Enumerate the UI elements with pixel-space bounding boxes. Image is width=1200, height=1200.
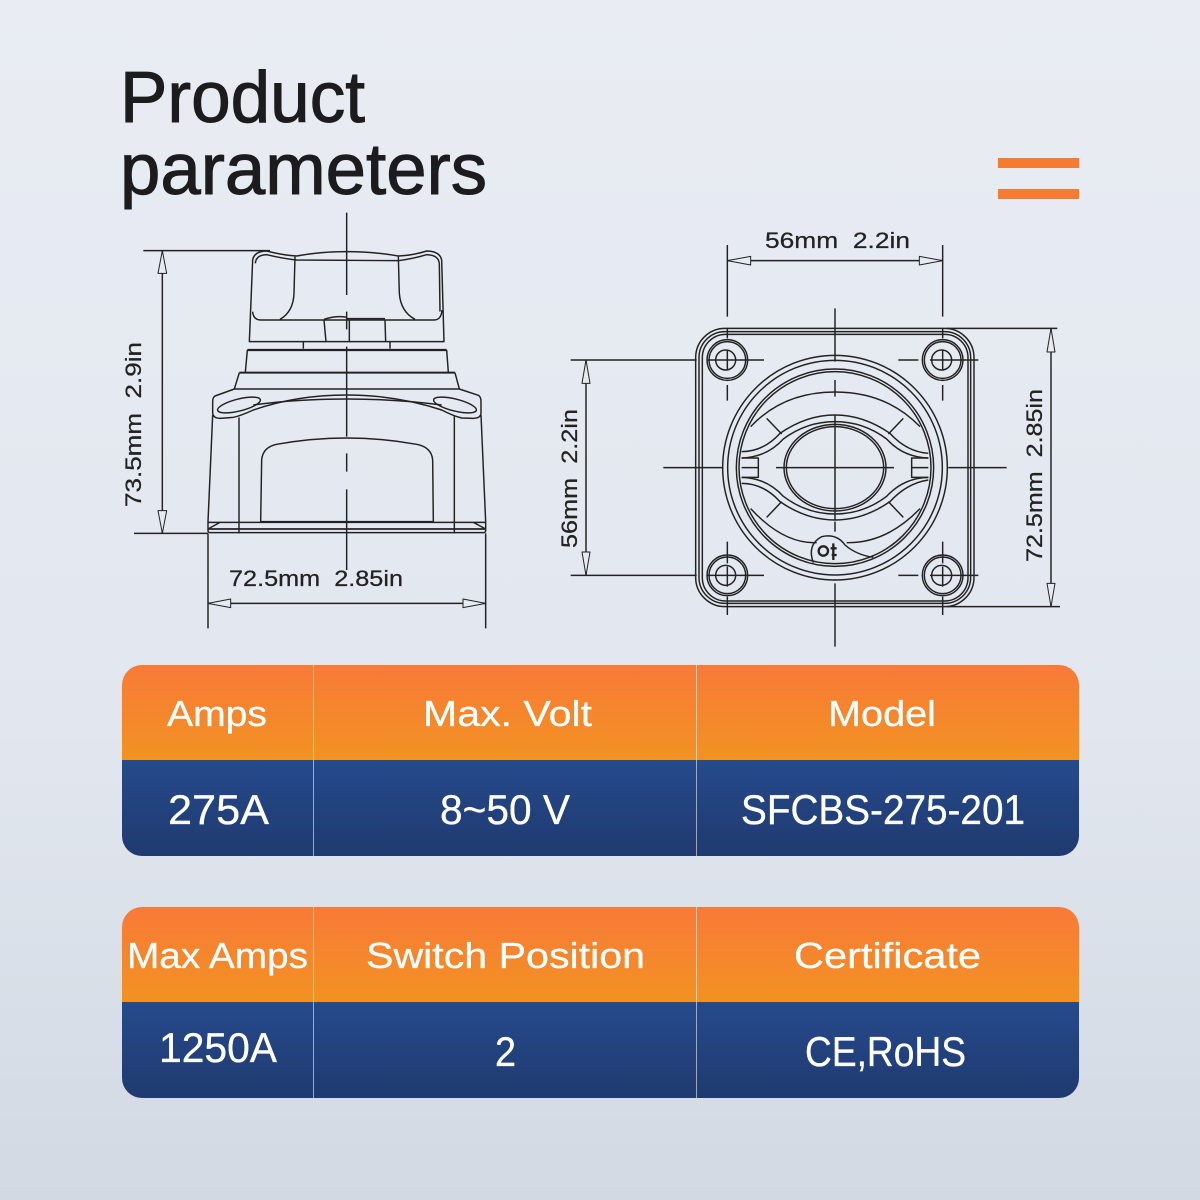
icon: orange double bar bbox=[998, 158, 1079, 199]
mounting plate bbox=[696, 328, 974, 607]
title bbox=[120, 58, 487, 210]
table: max amps, switch position, certificate: Switch Position bbox=[366, 935, 645, 976]
title: Product bbox=[120, 58, 365, 138]
table: max amps, switch position, certificate: Max Amps bbox=[127, 935, 308, 976]
mounting holes bbox=[707, 340, 963, 596]
rotary knob bbox=[723, 355, 947, 580]
centre lines and dimension lines bbox=[571, 245, 1060, 647]
table: amps, voltage, model: Max. Volt bbox=[423, 693, 592, 734]
table: max amps, switch position, certificate: CE,RoHS bbox=[805, 1028, 966, 1075]
title: parameters bbox=[120, 130, 487, 210]
dimension label: hole spacing horizontal: 56mm 2.2in bbox=[765, 228, 910, 253]
centre line and dimension lines bbox=[134, 213, 486, 628]
side view technical drawing bbox=[121, 213, 486, 628]
table: max amps, switch position, certificate: Certificate bbox=[794, 935, 981, 976]
dimension label: width: 72.5mm 2.85in bbox=[229, 566, 403, 591]
table: amps, voltage, model: Model bbox=[828, 693, 936, 734]
table: amps, voltage, model: SFCBS-275-201 bbox=[741, 786, 1025, 833]
dimension label: plate height: 72.5mm 2.85in bbox=[1022, 389, 1047, 562]
knob and body outline bbox=[208, 251, 486, 533]
table: amps, voltage, model: 8~50 V bbox=[440, 786, 570, 833]
front view technical drawing bbox=[557, 228, 1060, 647]
table: amps, voltage, model bbox=[122, 665, 1079, 856]
table: max amps, switch position, certificate: 2 bbox=[495, 1028, 516, 1075]
table: max amps, switch position, certificate: 1250A bbox=[159, 1024, 277, 1071]
table: amps, voltage, model: Amps bbox=[167, 693, 267, 734]
table: amps, voltage, model: 275A bbox=[168, 786, 269, 833]
dimension label: hole spacing vertical: 56mm 2.2in bbox=[557, 409, 582, 548]
dimension label: height: 73.5mm 2.9in bbox=[121, 342, 146, 507]
table: max amps, switch position, certificate bbox=[122, 907, 1079, 1098]
